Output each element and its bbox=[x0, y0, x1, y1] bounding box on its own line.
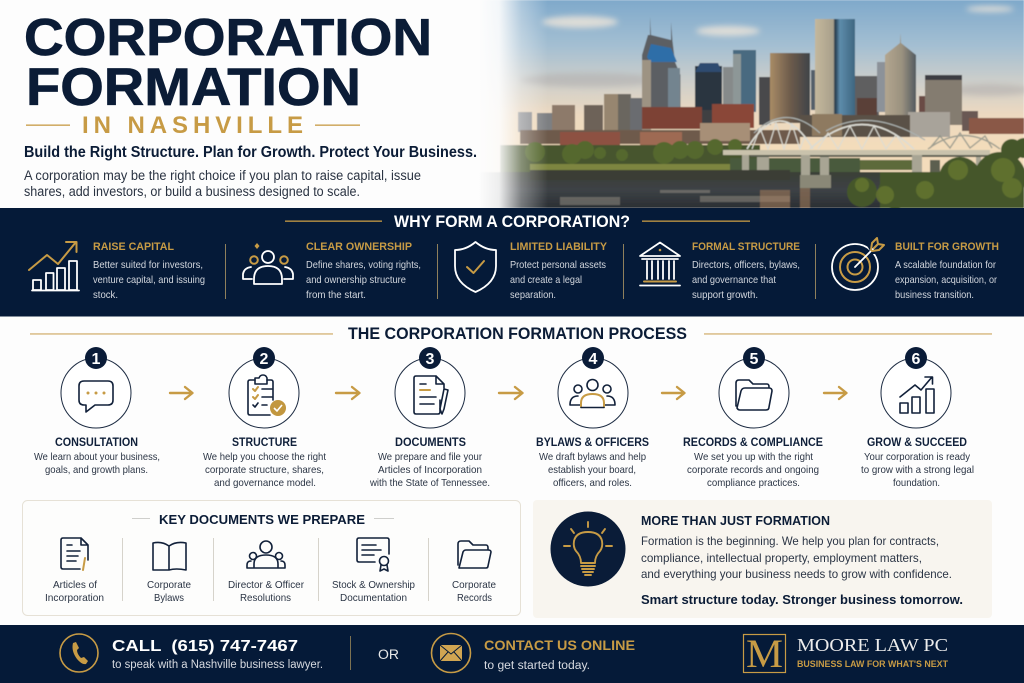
badge 2: 2 bbox=[260, 351, 269, 368]
badge 4: 4 bbox=[589, 351, 598, 368]
heading: why form a corporation: WHY FORM A CORPORATION? bbox=[394, 213, 630, 231]
document: stock and ownership: Stock & Ownership bbox=[332, 580, 415, 591]
paragraph: and everything your business needs to grow with confidence. bbox=[641, 567, 952, 581]
icon: shield bbox=[455, 242, 496, 292]
badge 6: 6 bbox=[912, 351, 921, 368]
document: corporate bylaws bbox=[147, 542, 191, 604]
logo: Moore Law PC: M bbox=[746, 631, 783, 676]
arrow bbox=[499, 387, 522, 399]
arrow bbox=[824, 387, 846, 399]
document: corporate records: Corporate bbox=[452, 580, 496, 591]
tagline: Build the Right Structure. Plan for Growth. Protect Your Business. bbox=[24, 144, 477, 161]
panel: why form a corporation bbox=[0, 208, 1024, 316]
benefit: clear ownership: CLEAR OWNERSHIP bbox=[306, 241, 412, 253]
step 3: documents bbox=[369, 347, 490, 489]
step 1: consultation: We learn about your business, bbox=[34, 452, 160, 463]
icon: growth chart bbox=[29, 242, 79, 290]
paragraph: compliance, intellectual property, employment matters, bbox=[641, 551, 922, 565]
document: articles of incorporation: Incorporation bbox=[45, 593, 104, 604]
step 2: structure: corporate structure, shares, bbox=[205, 465, 324, 476]
step 4: bylaws and officers: establish your board, bbox=[548, 465, 636, 476]
icon: envelope bbox=[432, 634, 470, 672]
step 4: bylaws and officers: officers, and roles. bbox=[553, 478, 632, 489]
paragraph bbox=[641, 534, 952, 581]
benefit: limited liability: Protect personal assets bbox=[510, 259, 606, 271]
badge 1: 1 bbox=[92, 351, 101, 368]
document: director and officer resolutions: Resolutions bbox=[240, 593, 291, 604]
icon: phone bbox=[60, 634, 98, 672]
heading: key documents: KEY DOCUMENTS WE PREPARE bbox=[159, 513, 365, 527]
benefit: clear ownership: and ownership structure bbox=[306, 274, 406, 286]
or label: OR bbox=[378, 647, 399, 662]
icon: owners group bbox=[243, 243, 293, 284]
intro text: A corporation may be the right choice if you plan to raise capital, issue bbox=[24, 168, 421, 183]
subtitle: in Nashville: IN NASHVILLE bbox=[82, 112, 303, 139]
document: stock and ownership bbox=[332, 538, 415, 604]
benefit: built for growth: expansion, acquisition, or bbox=[895, 274, 997, 286]
benefit: formal structure: and governance that bbox=[692, 274, 776, 286]
paragraph: Formation is the beginning. We help you plan for contracts, bbox=[641, 534, 939, 548]
benefit: raise capital bbox=[29, 241, 205, 301]
benefit: clear ownership: from the start. bbox=[306, 289, 366, 301]
arrow bbox=[336, 387, 360, 399]
benefit: raise capital: stock. bbox=[93, 289, 118, 301]
icon: speech bubble bbox=[79, 381, 113, 412]
logo: Moore Law PC bbox=[744, 631, 948, 676]
step 1: consultation bbox=[34, 347, 160, 476]
step 6: grow and succeed bbox=[861, 347, 974, 489]
benefit: built for growth: A scalable foundation for bbox=[895, 259, 996, 271]
icon: folder bbox=[736, 380, 772, 410]
title bbox=[24, 9, 432, 117]
badge 3 bbox=[419, 347, 441, 369]
icon: officers group bbox=[570, 380, 615, 408]
document: corporate records: Records bbox=[457, 593, 492, 604]
badge 6 bbox=[905, 347, 927, 369]
step 1: consultation: CONSULTATION bbox=[55, 437, 138, 449]
panel: key documents we prepare bbox=[22, 500, 520, 616]
step 2: structure bbox=[203, 347, 326, 489]
step 5: records and compliance: corporate records and ongoing bbox=[687, 465, 819, 476]
step 3: documents: DOCUMENTS bbox=[395, 437, 466, 449]
heading: the corporation formation process: THE CORPORATION FORMATION PROCESS bbox=[348, 325, 687, 343]
step 4: bylaws and officers: We draft bylaws and help bbox=[539, 452, 646, 463]
step 6: grow and succeed: GROW & SUCCEED bbox=[867, 437, 967, 449]
arrow bbox=[170, 387, 192, 399]
document: corporate bylaws: Bylaws bbox=[154, 593, 184, 604]
benefit: clear ownership bbox=[243, 241, 421, 301]
icon: clipboard bbox=[248, 375, 286, 416]
icon: document and pen bbox=[414, 376, 448, 414]
document: corporate records bbox=[452, 541, 496, 604]
benefit: built for growth: BUILT FOR GROWTH bbox=[895, 241, 999, 253]
benefit: limited liability bbox=[455, 241, 608, 301]
intro text bbox=[24, 168, 421, 199]
step 5: records and compliance bbox=[683, 347, 823, 489]
icon: light bulb bbox=[550, 512, 626, 586]
badge 2 bbox=[253, 347, 275, 369]
step 2: structure: We help you choose the right bbox=[203, 452, 326, 463]
badge 4 bbox=[582, 347, 604, 369]
heading: more than formation: MORE THAN JUST FORMATION bbox=[641, 514, 830, 528]
arrow bbox=[662, 387, 684, 399]
document: articles of incorporation bbox=[45, 538, 104, 604]
call to action: phone: CALL (615) 747-7467 bbox=[112, 638, 298, 655]
benefit: raise capital: venture capital, and issuing bbox=[93, 274, 205, 286]
badge 5: 5 bbox=[750, 351, 759, 368]
benefit: formal structure bbox=[640, 241, 800, 301]
icon: target bbox=[832, 238, 884, 290]
call to action: contact online: CONTACT US ONLINE bbox=[484, 637, 635, 653]
call to action: contact online bbox=[432, 634, 635, 672]
title line 1: CORPORATION bbox=[24, 9, 432, 67]
step 5: records and compliance: compliance practices. bbox=[707, 478, 800, 489]
step 2: structure: STRUCTURE bbox=[232, 437, 297, 449]
benefit: formal structure: Directors, officers, bylaws, bbox=[692, 259, 800, 271]
step 6: grow and succeed: foundation. bbox=[893, 478, 940, 489]
icon: courthouse bbox=[640, 242, 680, 286]
document: director and officer resolutions bbox=[228, 541, 305, 604]
slogan: Smart structure today. Stronger business tomorrow. bbox=[641, 592, 963, 607]
step 3: documents: Articles of Incorporation bbox=[378, 465, 482, 476]
benefit: built for growth bbox=[832, 238, 999, 301]
icon: rising chart bbox=[900, 377, 934, 413]
step 5: records and compliance: RECORDS & COMPLIANCE bbox=[683, 437, 823, 449]
badge 3: 3 bbox=[426, 351, 435, 368]
call to action: contact online: to get started today. bbox=[484, 660, 590, 672]
hero photo: Nashville skyline bbox=[478, 0, 1024, 209]
step 6: grow and succeed: to grow with a strong legal bbox=[861, 465, 974, 476]
benefit: built for growth: business transition. bbox=[895, 289, 974, 301]
document: articles of incorporation: Articles of bbox=[53, 580, 97, 591]
footer bar bbox=[0, 625, 1024, 683]
benefit: raise capital: RAISE CAPITAL bbox=[93, 241, 174, 253]
step 3: documents: We prepare and file your bbox=[378, 452, 483, 463]
document: stock and ownership: Documentation bbox=[340, 593, 407, 604]
benefit: raise capital: Better suited for investors, bbox=[93, 259, 203, 271]
benefit: limited liability: LIMITED LIABILITY bbox=[510, 241, 608, 253]
step 4: bylaws and officers bbox=[536, 347, 649, 489]
benefit: limited liability: separation. bbox=[510, 289, 556, 301]
logo: Moore Law PC: MOORE LAW PC bbox=[797, 635, 948, 655]
benefit: formal structure: support growth. bbox=[692, 289, 758, 301]
benefit: limited liability: and create a legal bbox=[510, 274, 582, 286]
intro text: shares, add investors, or build a business designed to scale. bbox=[24, 184, 360, 199]
step 2: structure: and governance model. bbox=[214, 478, 316, 489]
document: director and officer resolutions: Director & Officer bbox=[228, 580, 305, 591]
call to action: phone: to speak with a Nashville business lawyer. bbox=[112, 659, 323, 671]
step 4: bylaws and officers: BYLAWS & OFFICERS bbox=[536, 437, 649, 449]
step 5: records and compliance: We set you up with the right bbox=[694, 452, 813, 463]
badge 5 bbox=[743, 347, 765, 369]
call to action: phone bbox=[60, 634, 323, 672]
benefit: formal structure: FORMAL STRUCTURE bbox=[692, 241, 800, 253]
title line 2: FORMATION bbox=[26, 58, 361, 117]
document: corporate bylaws: Corporate bbox=[147, 580, 191, 591]
step 6: grow and succeed: Your corporation is ready bbox=[864, 452, 971, 463]
step 3: documents: with the State of Tennessee. bbox=[369, 478, 490, 489]
panel: more than just formation bbox=[533, 500, 992, 618]
logo: Moore Law PC: BUSINESS LAW FOR WHAT'S NEXT bbox=[797, 659, 948, 670]
step 1: consultation: goals, and growth plans. bbox=[45, 465, 148, 476]
benefit: clear ownership: Define shares, voting rights, bbox=[306, 259, 421, 271]
